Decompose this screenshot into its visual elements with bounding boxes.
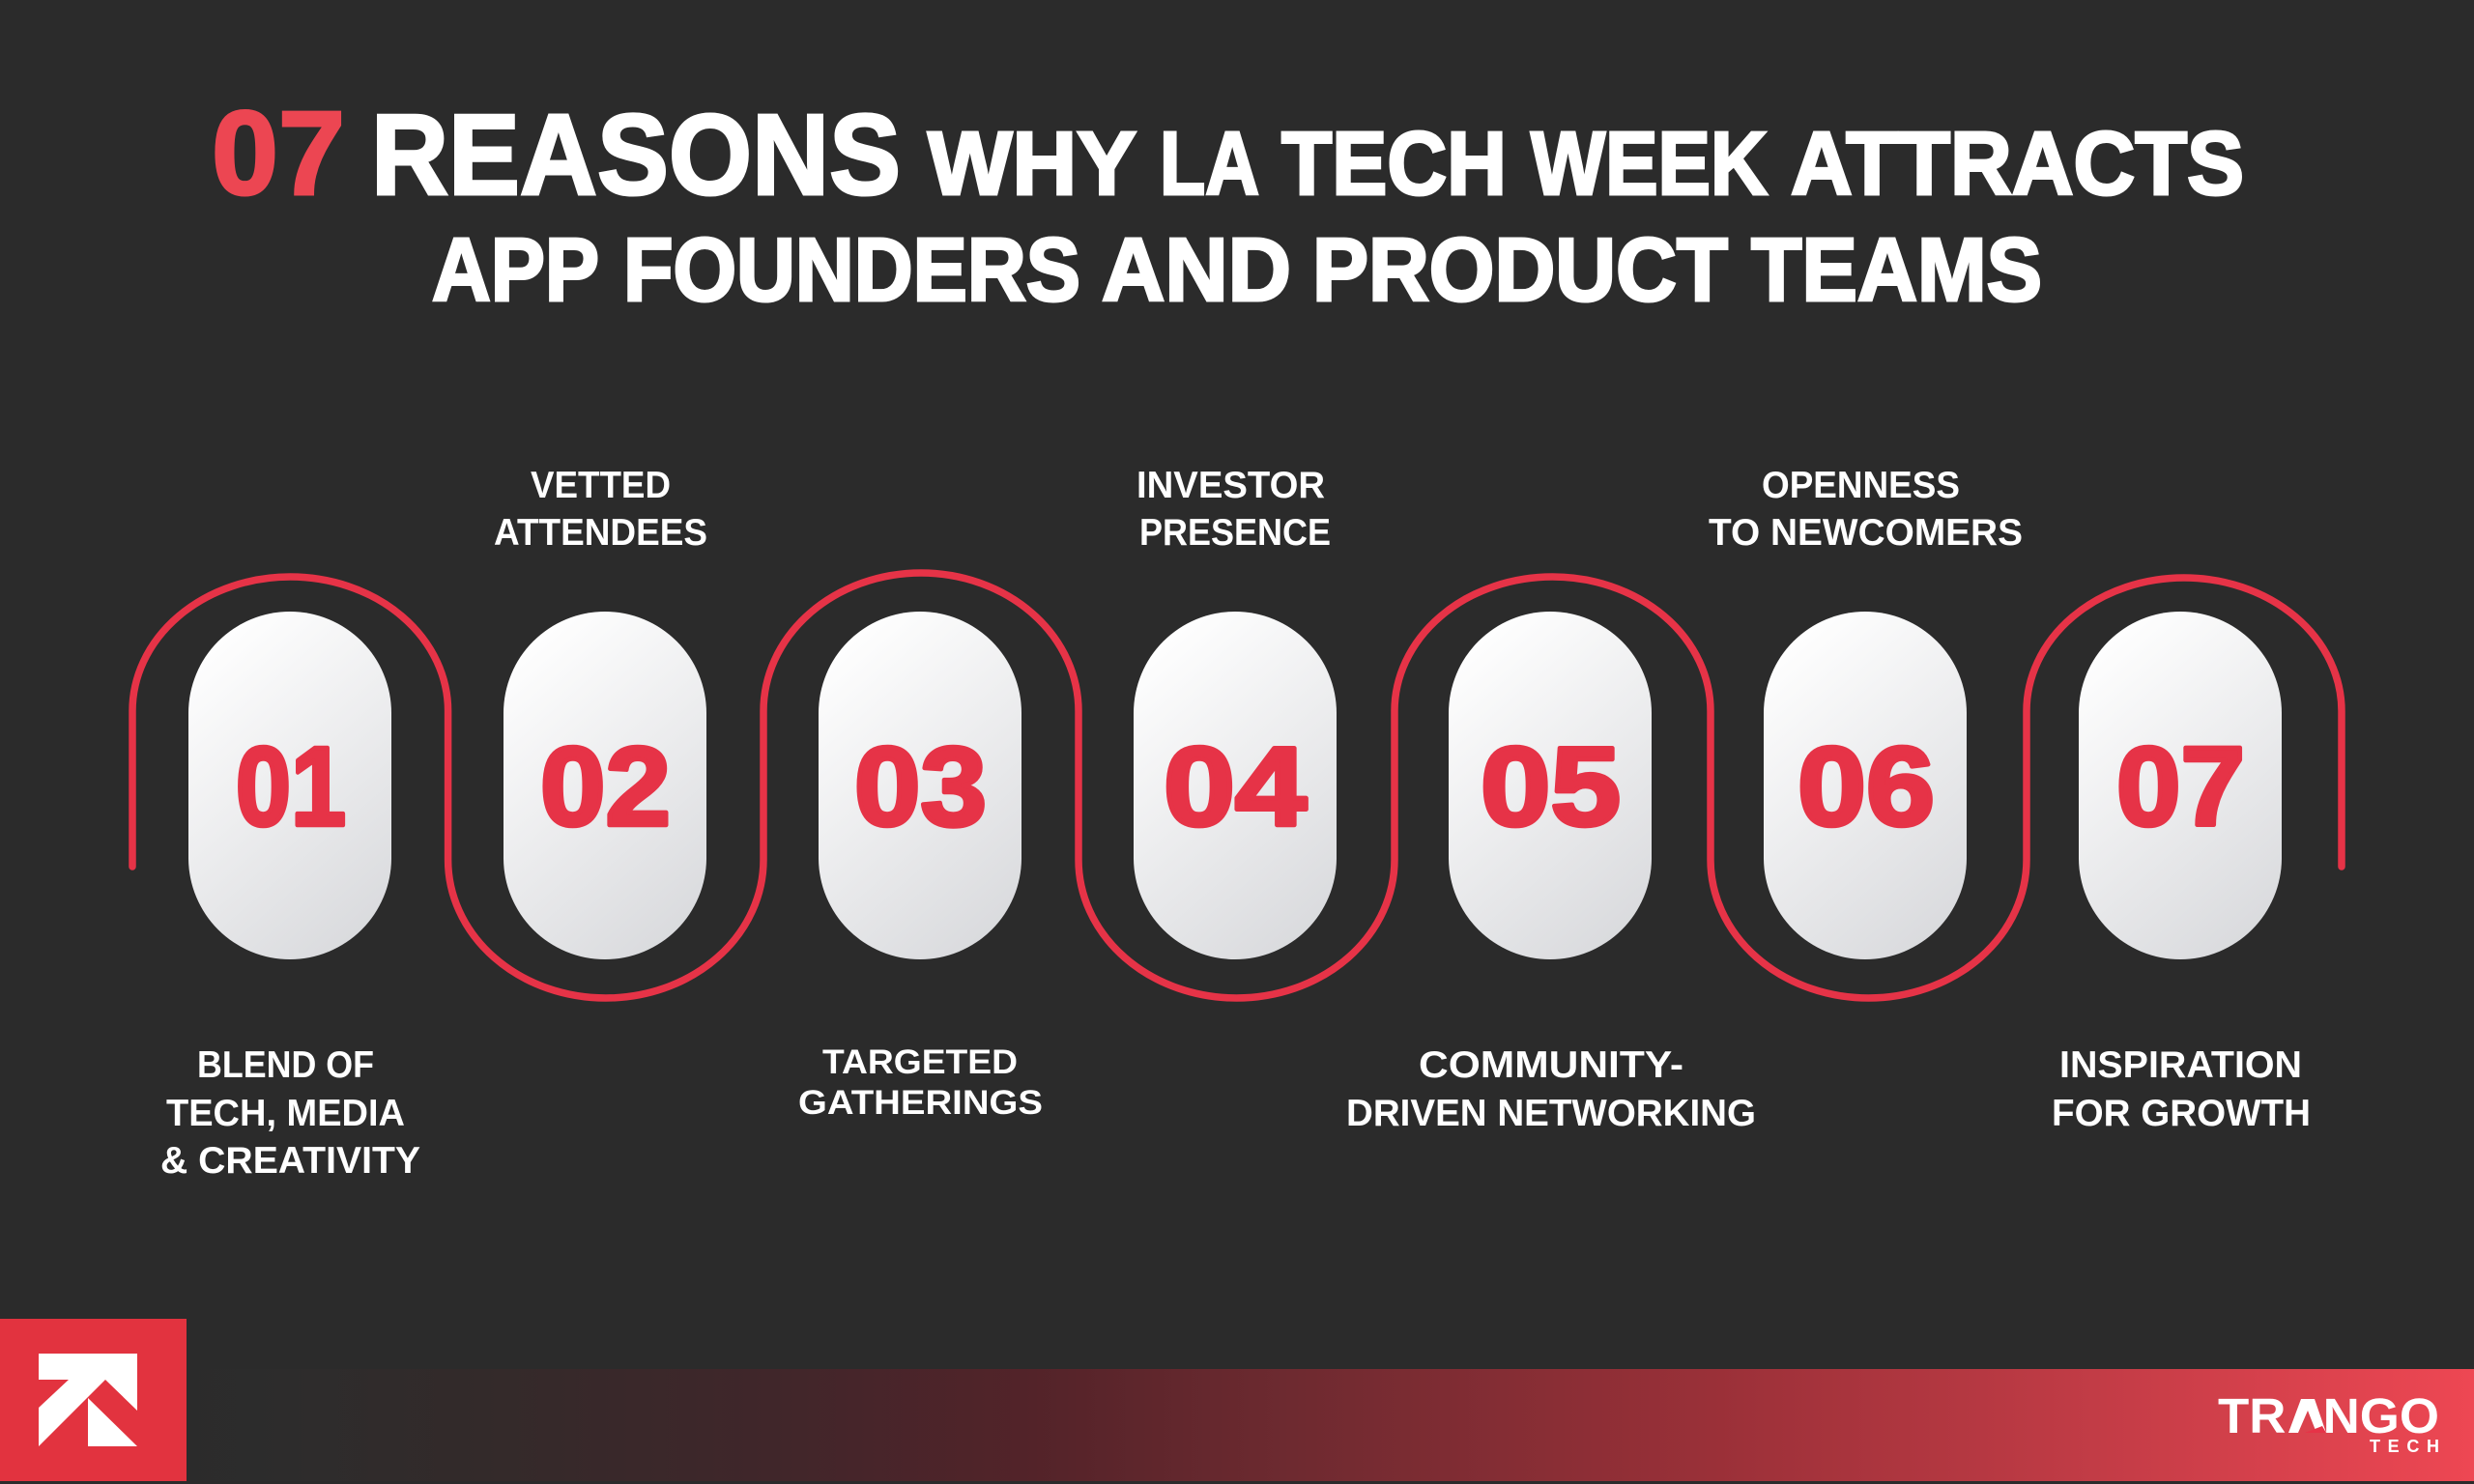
title: FOUNDERS: [623, 219, 1080, 320]
pill 07: 07: [2116, 724, 2245, 849]
title: ATTRACTS: [1791, 113, 2244, 214]
title: WHY: [928, 113, 1136, 214]
title: TECH: [1281, 113, 1507, 214]
logo: Trango Tech wordmark: TECH: [2370, 1437, 2439, 1456]
pill 07: [2079, 612, 2282, 959]
label 03: TARGETED: [822, 1043, 1018, 1081]
title: 07: [212, 88, 345, 220]
logo mark: red square with arrow: [0, 1319, 187, 1481]
title: LA: [1160, 113, 1259, 214]
logo: Trango Tech wordmark: TRANGO: [2218, 1388, 2439, 1443]
title: PRODUCT: [1312, 219, 1728, 320]
title: TEAMS: [1751, 219, 2042, 320]
title: WEEK: [1531, 113, 1768, 214]
label 07: [2052, 1044, 2311, 1134]
pill 02: [503, 612, 706, 959]
footer gradient bar: [184, 1369, 2474, 1481]
label 07: INSPIRATION: [2059, 1044, 2302, 1086]
label 02: VETTED: [531, 465, 671, 506]
pill 01: [188, 612, 391, 959]
serpentine connector line: [132, 573, 2342, 998]
label 05: DRIVEN NETWORKING: [1346, 1093, 1756, 1134]
pill 06: 06: [1798, 724, 1935, 849]
label 02: [494, 465, 707, 554]
label 05: [1346, 1044, 1756, 1134]
label 04: [1136, 465, 1331, 554]
label 04: INVESTOR: [1136, 465, 1325, 506]
label 01: [160, 1044, 420, 1182]
label 06: [1709, 465, 2023, 554]
label 06: TO NEWCOMERS: [1709, 512, 2023, 554]
pill 03: 03: [854, 724, 987, 849]
pill 05: 05: [1481, 724, 1621, 849]
label 01: TECH, MEDIA: [166, 1093, 405, 1134]
label 03: GATHERINGS: [798, 1084, 1043, 1122]
title: REASONS: [371, 91, 901, 219]
label 07: FOR GROWTH: [2052, 1093, 2311, 1134]
pill 02: 02: [540, 724, 671, 849]
label 05: COMMUNITY-: [1419, 1044, 1683, 1086]
label 06: OPENNESS: [1762, 465, 1960, 506]
label 01: BLEND OF: [197, 1044, 374, 1086]
pill 04: 04: [1164, 724, 1307, 849]
pill 01: 01: [236, 724, 346, 849]
label 03: [798, 1043, 1043, 1122]
title: APP: [432, 219, 599, 320]
label 01: & CREATIVITY: [160, 1140, 420, 1182]
pill 03: [819, 612, 1021, 959]
title: AND: [1102, 219, 1291, 320]
label 04: PRESENCE: [1139, 512, 1331, 554]
label 02: ATTENDEES: [494, 512, 707, 554]
pill 06: [1764, 612, 1967, 959]
title: [212, 88, 2244, 320]
pill 04: [1134, 612, 1337, 959]
pill 05: [1449, 612, 1652, 959]
